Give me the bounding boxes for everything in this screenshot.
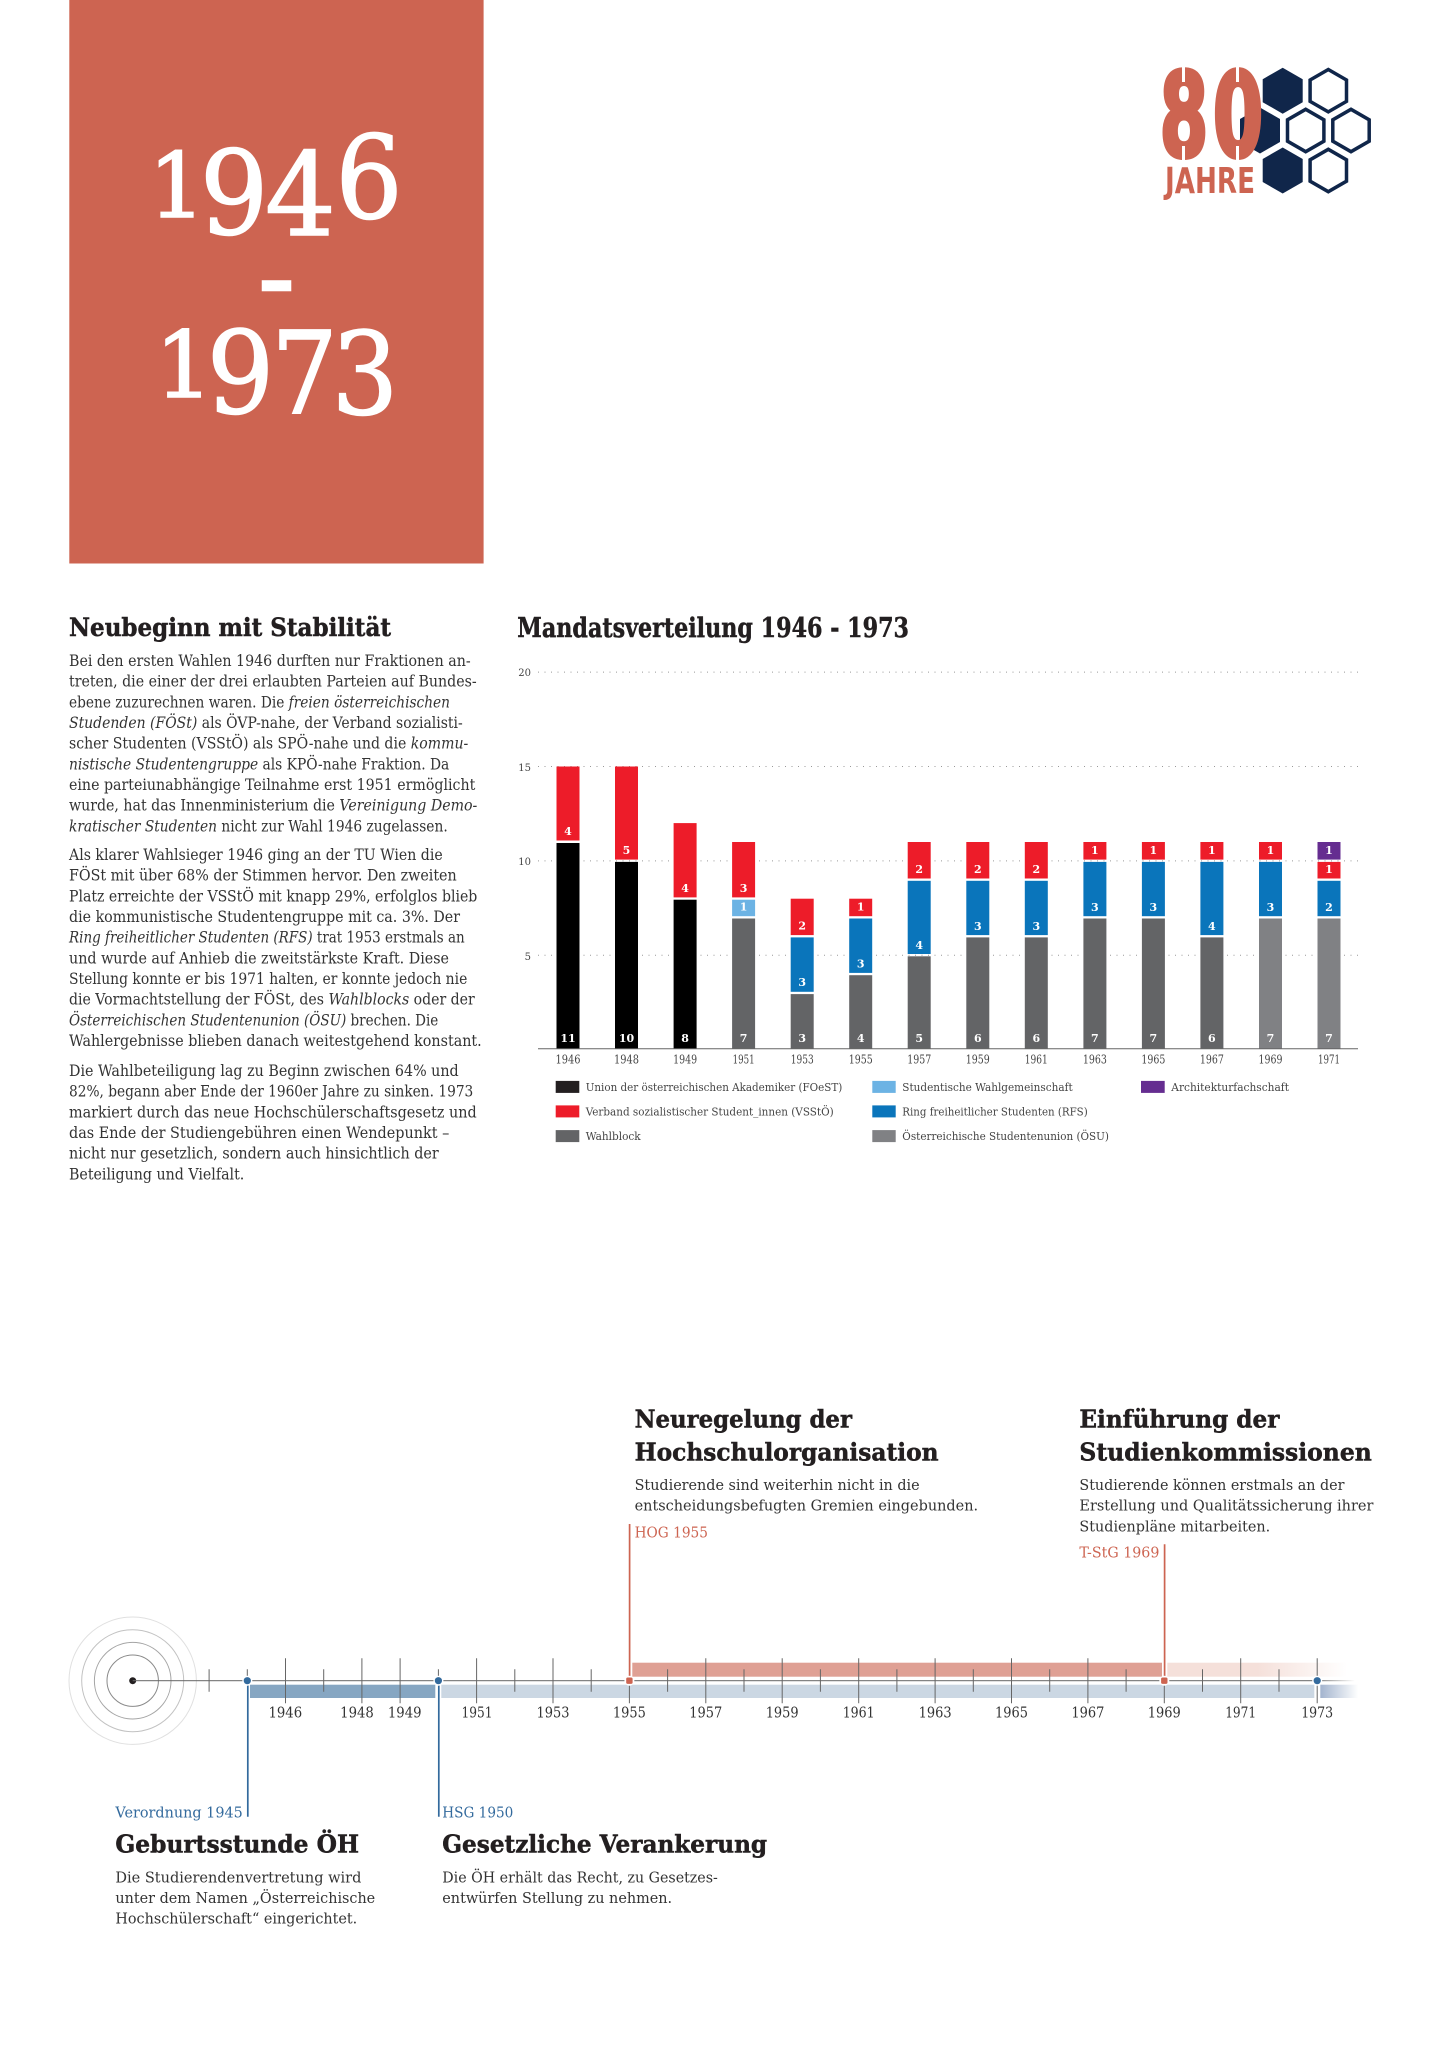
bar 1971 (1318, 842, 1340, 1050)
timeline year labels: 1951 (462, 1704, 492, 1722)
logo: 80 Jahre with hexagons: 0 (1213, 48, 1263, 184)
timeline year labels: 1961 (843, 1704, 875, 1722)
heading: Neubeginn mit Stabilität: Neubeginn mit Stabilität (69, 613, 391, 642)
x axis year labels: 1949 (673, 1052, 697, 1066)
logo: 80 Jahre with hexagons: JAHRE (1163, 161, 1255, 202)
callout: Neuregelung der Hochschulorganisation: Studierende sind weiterhin nicht in die (635, 1476, 920, 1494)
bar 1953 (791, 899, 814, 1050)
title years: 4 (265, 128, 336, 262)
bar 1963: 3 (1091, 901, 1099, 914)
text block: paragraph 3: markiert durch das neue Hochschülerschaftsgesetz und (69, 1103, 477, 1121)
title years: 6 (335, 112, 403, 246)
heading: Mandatsverteilung 1946 - 1973: Mandatsverteilung 1946 - 1973 (517, 613, 909, 644)
timeline origin circles (69, 1617, 196, 1744)
bar 1946: 4 (564, 825, 572, 838)
timeline year labels: 1971 (1225, 1704, 1256, 1722)
x axis year labels: 1961 (1025, 1052, 1048, 1066)
callout: Neuregelung der Hochschulorganisation: Neuregelung der (635, 1404, 852, 1433)
text block: paragraph 3: Beteiligung und Vielfalt. (69, 1165, 244, 1183)
text block: paragraph 1: wurde, hat das Innenministerium die Vereinigung Demo- (69, 797, 477, 815)
timeline year labels: 1957 (689, 1704, 722, 1722)
bar 1946 (556, 766, 580, 1050)
period bar: light red after 1969 (1167, 1663, 1347, 1677)
callout: Neuregelung der Hochschulorganisation (635, 1404, 978, 1541)
text block: paragraph 1 (69, 652, 477, 835)
bar 1959: 3 (974, 920, 982, 933)
bar 1948: 10 (619, 1032, 634, 1045)
x axis year labels: 1963 (1083, 1052, 1107, 1066)
bar 1948: 5 (623, 844, 630, 857)
title years (148, 112, 403, 441)
bar 1963: 7 (1091, 1032, 1099, 1045)
bar 1951: 1 (740, 900, 747, 914)
x axis year labels: 1971 (1318, 1052, 1340, 1066)
event line and marker: Verordnung 1945 (242, 1676, 252, 1817)
text block: paragraph 1: nistische Studentengruppe als KPÖ-nahe Fraktion. Da (69, 755, 449, 773)
bar 1961 (1025, 842, 1048, 1050)
event line and marker: HSG 1950 (433, 1676, 443, 1817)
bar 1951: 3 (740, 882, 747, 895)
callout: Einführung der Studienkommissionen: T-StG 1969 (1079, 1544, 1159, 1562)
callout: Einführung der Studienkommissionen (1079, 1404, 1374, 1562)
text block: paragraph 3: 82%, begann aber Ende der 1960er Jahre zu sinken. 1973 (69, 1083, 473, 1101)
text block: paragraph 2: Als klarer Wahlsieger 1946 ging an der TU Wien die (68, 846, 443, 864)
x axis year labels: 1967 (1200, 1052, 1224, 1066)
timeline year labels: 1963 (919, 1704, 952, 1722)
callout: Einführung der Studienkommissionen: Erstellung und Qualitätssicherung ihrer (1079, 1497, 1374, 1515)
text block: paragraph 1: eine parteiunabhängige Teilnahme erst 1951 ermöglicht (69, 776, 476, 794)
bar 1969: 1 (1267, 844, 1274, 857)
x axis year labels: 1965 (1141, 1052, 1165, 1066)
x axis year labels: 1946 (555, 1052, 580, 1066)
bar 1949: 8 (681, 1032, 689, 1045)
title years: - (257, 204, 296, 349)
timeline year labels (268, 1704, 1333, 1722)
bar 1965 (1142, 842, 1165, 1050)
event marker: 1973 (1312, 1676, 1322, 1686)
bar 1955: 4 (857, 1032, 865, 1045)
callout: Geburtsstunde ÖH: Die Studierendenvertretung wird (115, 1868, 362, 1886)
axis line (133, 1680, 1355, 1681)
callout: Gesetzliche Verankerung (442, 1803, 767, 1907)
chart legend: Wahlblock (586, 1130, 641, 1143)
timeline (69, 1524, 1358, 1817)
bar 1957: 4 (915, 939, 923, 952)
timeline year labels: 1948 (340, 1704, 374, 1722)
timeline year labels: 1953 (536, 1704, 570, 1722)
bar 1967: 4 (1208, 920, 1216, 933)
callout: Geburtsstunde ÖH (114, 1803, 375, 1928)
y axis labels (518, 668, 531, 963)
callout: Neuregelung der Hochschulorganisation: entscheidungsbefugten Gremien eingebunden. (635, 1497, 978, 1515)
period bar: dark blue 1945-1950 (250, 1685, 435, 1698)
x axis year labels: 1957 (907, 1052, 931, 1066)
bar 1965: 1 (1150, 844, 1157, 857)
bar 1955: 1 (857, 900, 865, 914)
y axis labels: 15 (518, 763, 531, 774)
y axis labels: 5 (525, 952, 531, 963)
y axis labels: 10 (518, 857, 531, 868)
bar 1967: 1 (1208, 844, 1216, 857)
chart legend: Union der österreichischen Akademiker (FOeST) (586, 1081, 842, 1094)
callout: Neuregelung der Hochschulorganisation: HOG 1955 (635, 1523, 708, 1541)
x axis year labels: 1969 (1259, 1052, 1283, 1066)
bar 1965: 3 (1150, 901, 1157, 914)
period bar: fading blue after 1973 (1320, 1685, 1358, 1698)
callout: Gesetzliche Verankerung: HSG 1950 (442, 1803, 513, 1821)
bar 1953: 3 (798, 976, 806, 989)
axis ticks (209, 1658, 1317, 1703)
title years: 1 (148, 134, 206, 239)
callout: Geburtsstunde ÖH: Geburtsstunde ÖH (115, 1829, 359, 1858)
title years: 1 (155, 312, 213, 419)
callout: Geburtsstunde ÖH: unter dem Namen „Österreichische (115, 1889, 375, 1907)
text block: paragraph 2: Wahlergebnisse blieben danach weitestgehend konstant. (69, 1032, 482, 1050)
text block: paragraph 2: Stellung konnte er bis 1971 halten, er konnte jedoch nie (69, 970, 467, 988)
text block: paragraph 1: treten, die einer der drei erlaubten Parteien auf Bundes- (69, 673, 477, 691)
x axis year labels: 1948 (614, 1052, 639, 1066)
chart legend: Verband sozialistischer Student_innen (VSStÖ) (585, 1104, 834, 1118)
bar 1955 (849, 899, 872, 1050)
bar 1963: 1 (1091, 844, 1099, 857)
bar 1948 (615, 766, 638, 1050)
title years: 7 (271, 307, 338, 440)
bar 1961: 2 (1032, 863, 1040, 876)
timeline year labels: 1969 (1148, 1704, 1181, 1722)
bar 1957 (908, 842, 931, 1050)
text block: paragraph 2: Ring freiheitlicher Studenten (RFS) trat 1953 erstmals an (68, 929, 465, 947)
chart legend: Ring freiheitlicher Studenten (RFS) (902, 1105, 1088, 1118)
bar 1953: 3 (798, 1032, 806, 1045)
bar 1951 (732, 842, 755, 1050)
bar 1971: 2 (1325, 901, 1333, 914)
bar 1957: 5 (915, 1032, 923, 1045)
period bar: red 1955-1969 (632, 1663, 1162, 1677)
callout: Gesetzliche Verankerung: Gesetzliche Verankerung (442, 1829, 767, 1858)
callout: Geburtsstunde ÖH: Verordnung 1945 (114, 1803, 243, 1821)
x axis year labels (556, 1052, 1340, 1066)
y axis labels: 20 (518, 668, 531, 679)
timeline year labels: 1955 (613, 1704, 646, 1722)
bar 1961: 3 (1032, 920, 1040, 933)
callout: Geburtsstunde ÖH: Hochschülerschaft“ eingerichtet. (115, 1910, 357, 1928)
callout: Einführung der Studienkommissionen: Studienkommissionen (1079, 1438, 1372, 1467)
x axis year labels: 1951 (733, 1052, 755, 1066)
title years: 9 (200, 127, 268, 262)
bar 1949 (674, 823, 697, 1050)
callout: Gesetzliche Verankerung: Die ÖH erhält das Recht, zu Gesetzes- (442, 1868, 718, 1886)
bar 1946: 11 (560, 1032, 576, 1045)
bar 1953: 2 (798, 920, 806, 932)
timeline year labels: 1946 (268, 1704, 302, 1722)
bar 1951: 7 (740, 1032, 747, 1045)
timeline year labels: 1973 (1301, 1704, 1333, 1722)
bar 1957: 2 (915, 863, 923, 876)
bar 1971: 1 (1325, 844, 1333, 857)
timeline year labels: 1965 (995, 1704, 1028, 1722)
bar chart: Mandatsverteilung (518, 668, 1360, 1066)
bar 1969: 3 (1267, 901, 1274, 914)
bar 1959: 2 (974, 863, 982, 876)
text block: paragraph 2 (68, 846, 482, 1050)
callout: Einführung der Studienkommissionen: Studienpläne mitarbeiten. (1079, 1518, 1270, 1536)
timeline year labels: 1949 (388, 1704, 422, 1722)
bar 1949: 4 (681, 882, 689, 895)
timeline year labels: 1967 (1071, 1704, 1104, 1722)
callout: Einführung der Studienkommissionen: Einführung der (1079, 1404, 1280, 1433)
period bar: light blue 1950-1973 (441, 1685, 1314, 1698)
callout: Gesetzliche Verankerung: entwürfen Stellung zu nehmen. (442, 1889, 672, 1907)
bar 1959 (966, 842, 989, 1050)
bar 1969: 7 (1267, 1032, 1274, 1045)
text block: paragraph 2: die Vormachtstellung der FÖSt, des Wahlblocks oder der (69, 991, 475, 1009)
timeline year labels: 1959 (766, 1704, 799, 1722)
bar 1967: 6 (1208, 1032, 1216, 1045)
event line and marker: T-StG 1969 (1159, 1544, 1169, 1686)
bar 1971: 1 (1325, 863, 1333, 876)
x axis year labels: 1953 (791, 1052, 814, 1066)
text block: paragraph 3: Die Wahlbeteiligung lag zu Beginn zwischen 64% und (69, 1062, 459, 1080)
text block: paragraph 3 (69, 1062, 477, 1183)
x axis year labels: 1959 (966, 1052, 990, 1066)
bar 1961: 6 (1032, 1032, 1040, 1045)
chart legend (556, 1081, 1290, 1143)
bar 1967 (1200, 842, 1223, 1050)
callout: Einführung der Studienkommissionen: Studierende können erstmals an der (1079, 1476, 1345, 1494)
title years: 9 (207, 307, 274, 440)
text block: paragraph 1: Bei den ersten Wahlen 1946 durften nur Fraktionen an- (69, 652, 471, 670)
text block: paragraph 1: scher Studenten (VSStÖ) als SPÖ-nahe und die kommu- (69, 735, 468, 753)
bar 1969 (1259, 842, 1282, 1050)
chart legend: Studentische Wahlgemeinschaft (902, 1081, 1073, 1094)
text block: paragraph 1: ebene zuzurechnen waren. Die freien österreichischen (69, 693, 450, 711)
chart legend: Architekturfachschaft (1170, 1081, 1290, 1094)
text block: paragraph 2: Österreichischen Studentenunion (ÖSU) brechen. Die (69, 1011, 438, 1029)
text block: paragraph 1: Studenden (FÖSt) als ÖVP-nahe, der Verband sozialisti- (69, 714, 463, 732)
text block: paragraph 2: und wurde auf Anhieb die zweitstärkste Kraft. Diese (69, 949, 449, 967)
text block: paragraph 3: nicht nur gesetzlich, sondern auch hinsichtlich der (69, 1145, 439, 1163)
bar 1971: 7 (1325, 1032, 1333, 1045)
bar 1959: 6 (974, 1032, 982, 1045)
logo: 80 Jahre with hexagons (1160, 48, 1369, 202)
text block: paragraph 2: Platz erreichte der VSStÖ mit knapp 29%, erfolglos blieb (69, 887, 477, 905)
text block: paragraph 1: kratischer Studenten nicht zur Wahl 1946 zugelassen. (69, 817, 448, 835)
event line and marker: HOG 1955 (624, 1524, 634, 1686)
callout: Neuregelung der Hochschulorganisation: Hochschulorganisation (635, 1438, 939, 1467)
bar 1965: 7 (1150, 1032, 1157, 1045)
text block: paragraph 2: die kommunistische Studentengruppe mit ca. 3%. Der (69, 908, 461, 926)
bar 1955: 3 (857, 958, 865, 970)
title years: 3 (332, 308, 398, 441)
bar 1963 (1083, 842, 1106, 1050)
x axis year labels: 1955 (849, 1052, 873, 1066)
text block: paragraph 3: das Ende der Studiengebühren einen Wendepunkt – (69, 1124, 450, 1142)
chart legend: Österreichische Studentenunion (ÖSU) (902, 1129, 1109, 1143)
text block: paragraph 2: FÖSt mit über 68% der Stimmen hervor. Den zweiten (69, 867, 457, 885)
panel: title block 1946 - 1973 (69, 0, 484, 564)
logo: 80 Jahre with hexagons: 8 (1160, 48, 1208, 184)
